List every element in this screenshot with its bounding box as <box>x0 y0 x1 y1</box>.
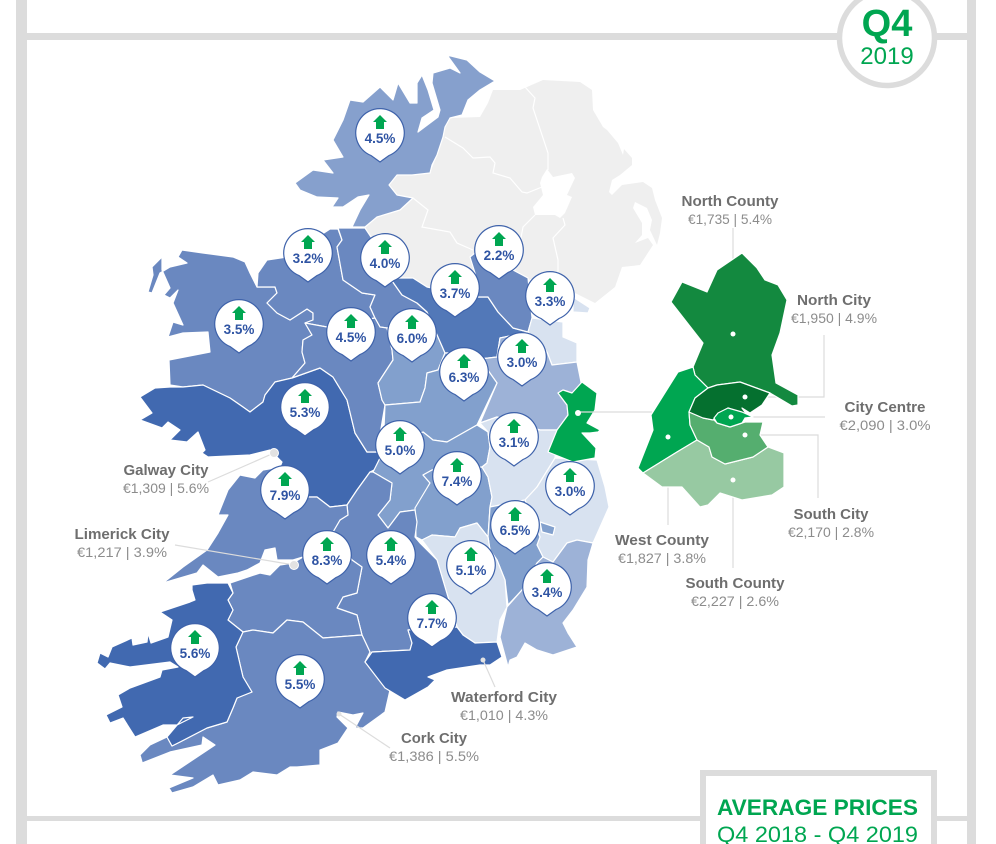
county: Laois <box>415 467 492 540</box>
county: Westmeath <box>383 353 497 452</box>
county: Kilkenny <box>422 523 507 643</box>
county: Waterford <box>365 627 502 700</box>
pin: Kerry <box>171 624 219 677</box>
county: Kildare <box>480 417 557 507</box>
pin: Roscommon <box>327 308 375 361</box>
pin: Kildare <box>490 413 538 466</box>
pin: Leitrim <box>361 234 409 287</box>
pin: Cork: 5.5% <box>285 677 315 692</box>
label: West County: €1,827 | 3.8% <box>618 550 706 566</box>
pin: Donegal <box>356 109 404 162</box>
pin: Kilkenny <box>447 541 495 594</box>
pin: Wexford <box>523 563 571 616</box>
county: Carlow <box>488 500 543 605</box>
district: North County <box>671 253 798 406</box>
label: North City: North City <box>797 293 871 309</box>
county: Roscommon <box>292 318 393 452</box>
leader lines of the inset <box>668 228 825 568</box>
pin: Leitrim: 4.0% <box>370 256 400 271</box>
pin: Limerick: 8.3% <box>312 553 342 568</box>
pin: Kilkenny: 5.1% <box>456 563 486 578</box>
label: North County: €1,735 | 5.4% <box>688 211 772 227</box>
label: Waterford City: Waterford City <box>451 690 557 706</box>
pin: Tipperary <box>367 531 415 584</box>
leader: Galway City <box>208 448 278 482</box>
pin: Tipperary: 5.4% <box>376 553 406 568</box>
pin: Wicklow <box>546 462 594 515</box>
pin: Kerry: 5.6% <box>180 646 210 661</box>
district: City Centre <box>714 408 753 427</box>
Dublin inset map <box>638 253 798 507</box>
county: Clare <box>163 467 348 583</box>
pin: Limerick <box>303 531 351 584</box>
pin: Waterford <box>408 594 456 647</box>
label: North City <box>791 293 877 326</box>
pin: Meath: 3.0% <box>507 355 537 370</box>
pin: Clare: 7.9% <box>270 488 300 503</box>
label: South City: South City <box>794 507 868 523</box>
label: City Centre: €2,090 | 3.0% <box>840 417 930 433</box>
district: West County <box>638 367 708 473</box>
county: Longford <box>378 312 445 405</box>
label: South County: South County <box>686 576 784 592</box>
quarter badge <box>840 0 934 86</box>
pin: Sligo: 3.2% <box>293 251 323 266</box>
pin: Longford: 6.0% <box>397 331 427 346</box>
leader: Waterford City <box>480 658 495 687</box>
connector: Dublin to inset <box>578 411 652 413</box>
county: Wexford <box>500 540 593 667</box>
county: Limerick <box>228 532 362 638</box>
county: Leitrim <box>337 228 427 328</box>
district: North City <box>689 382 770 420</box>
pin: Cork <box>276 655 324 708</box>
county: Carlow detail <box>540 522 555 535</box>
label: Limerick City <box>74 527 170 560</box>
district: South City <box>689 412 768 464</box>
pin: Westmeath: 6.3% <box>449 370 479 385</box>
pin: Laois: 7.4% <box>442 474 472 489</box>
label: South City: €2,170 | 2.8% <box>788 524 874 540</box>
district: South County <box>643 440 784 507</box>
label: Waterford City: €1,010 | 4.3% <box>460 707 548 723</box>
label: Galway City: €1,309 | 5.6% <box>123 480 209 496</box>
pin: Offaly: 5.0% <box>385 443 415 458</box>
label: Limerick City: Limerick City <box>74 527 170 543</box>
label: Cork City: €1,386 | 5.5% <box>389 748 479 764</box>
map of Northern Ireland, grey <box>365 80 662 303</box>
label: Cork City: Cork City <box>401 731 467 747</box>
county: Sligo <box>257 229 375 327</box>
pin: Wicklow: 3.0% <box>555 484 585 499</box>
county: Mayo <box>148 250 313 412</box>
pin: Donegal: 4.5% <box>365 131 395 146</box>
county: Louth peninsula <box>573 297 590 313</box>
label: South County: €2,227 | 2.6% <box>691 593 779 609</box>
pin: Kildare: 3.1% <box>499 435 529 450</box>
label: Galway City <box>123 463 209 496</box>
label: North County <box>682 194 778 227</box>
inset dots <box>575 332 748 482</box>
label: North City: €1,950 | 4.9% <box>791 310 877 326</box>
county: Tipperary <box>333 472 457 662</box>
label: South County <box>686 576 784 609</box>
pin: Galway <box>281 383 329 436</box>
label: Limerick City: €1,217 | 3.9% <box>77 544 167 560</box>
county: Monaghan <box>470 253 532 332</box>
pin: Laois <box>433 452 481 505</box>
average prices box <box>703 773 934 844</box>
label: West County: West County <box>615 533 709 549</box>
average prices box: AVERAGE PRICES <box>717 795 918 820</box>
pin: Cavan <box>431 264 479 317</box>
label: Galway City: Galway City <box>124 463 208 479</box>
pin: Carlow <box>491 501 539 554</box>
pin: Wexford: 3.4% <box>532 585 562 600</box>
pin: Mayo: 3.5% <box>224 322 254 337</box>
label: City Centre: City Centre <box>844 400 926 416</box>
label: South City <box>788 507 874 540</box>
county: Kerry <box>97 583 252 746</box>
county: Louth <box>528 318 577 365</box>
pin: Roscommon: 4.5% <box>336 330 366 345</box>
pin: Longford <box>388 309 436 362</box>
county: Donegal <box>295 55 495 227</box>
label: Cork City <box>389 731 479 764</box>
county: Dublin <box>548 382 600 462</box>
map of Republic of Ireland counties <box>97 55 609 793</box>
pin: Monaghan: 2.2% <box>484 248 514 263</box>
pin: Offaly <box>376 421 424 474</box>
pin: Louth <box>526 272 574 325</box>
pin: Clare <box>261 466 309 519</box>
county: Cork <box>132 620 390 793</box>
pin: Meath <box>498 333 546 386</box>
county: Offaly <box>373 425 490 528</box>
county: Galway <box>140 368 390 507</box>
pin: Galway: 5.3% <box>290 405 320 420</box>
label: City Centre <box>840 400 930 433</box>
pin: Waterford: 7.7% <box>417 616 447 631</box>
pin: Carlow: 6.5% <box>500 523 530 538</box>
pin: Louth: 3.3% <box>535 294 565 309</box>
label: Waterford City <box>451 690 557 723</box>
county: Cavan <box>390 278 528 359</box>
pin: Westmeath <box>440 348 488 401</box>
leader: Cork City <box>336 712 390 748</box>
pin: Monaghan <box>475 226 523 279</box>
pin: Cavan: 3.7% <box>440 286 470 301</box>
quarter badge: Q4 <box>862 3 912 45</box>
quarter badge: 2019 <box>860 43 914 70</box>
pin: Mayo <box>215 300 263 353</box>
pin: Sligo <box>284 229 332 282</box>
county: Wicklow <box>525 458 609 562</box>
label: North County: North County <box>682 194 778 210</box>
label: West County <box>615 533 709 566</box>
leader: Limerick City <box>175 545 298 570</box>
county: Meath <box>480 332 582 430</box>
